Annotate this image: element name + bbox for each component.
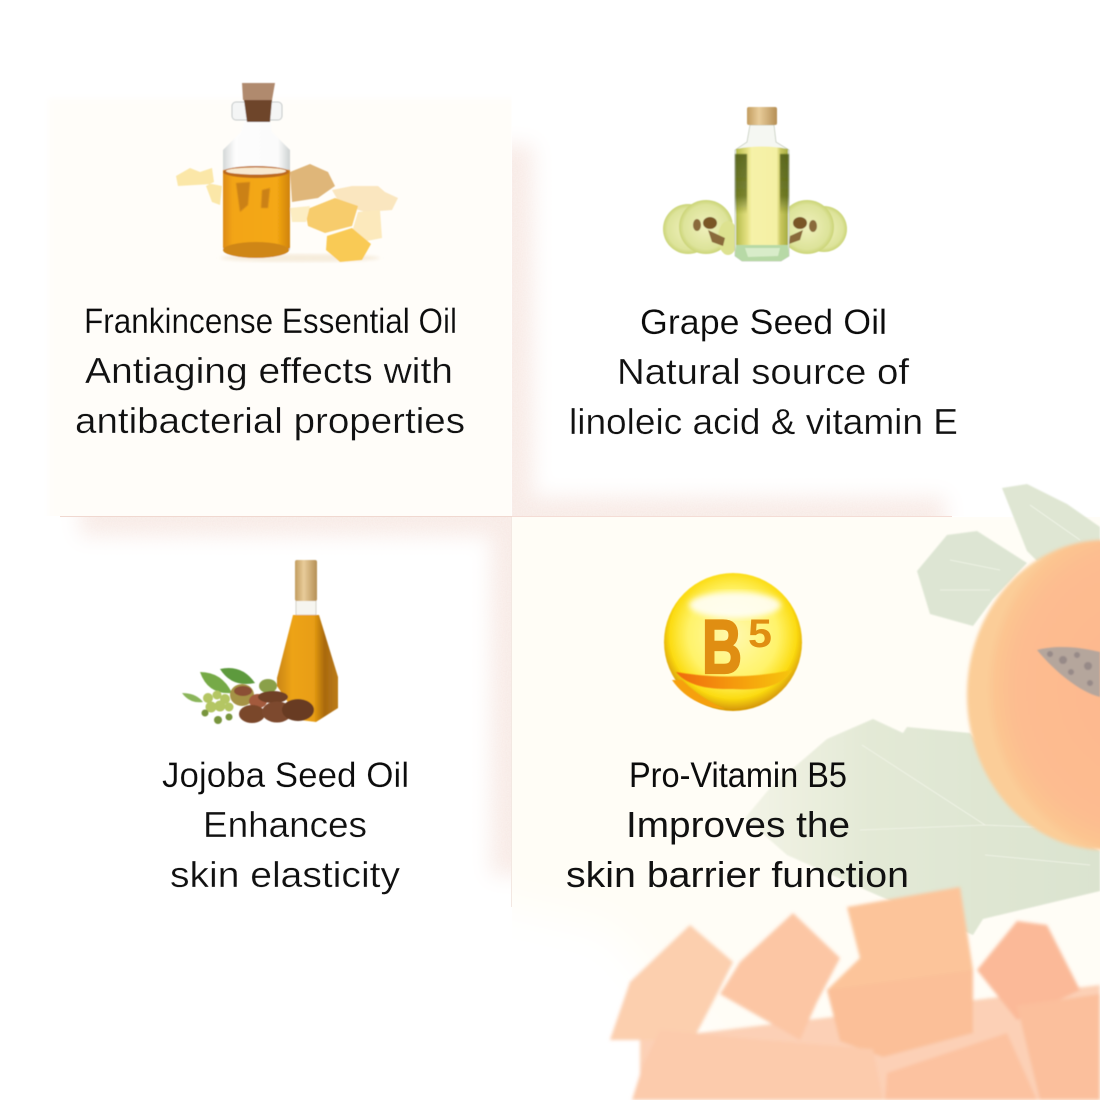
- panel: jojoba seed oil: [162, 560, 409, 895]
- heading: Jojoba Seed Oil: Jojoba Seed Oil: [162, 756, 409, 795]
- panel: frankincense essential oil: [75, 83, 465, 441]
- text: improves the: Improves the: [626, 804, 850, 845]
- papaya half: [967, 540, 1100, 850]
- panel background top left: [48, 98, 528, 538]
- text: natural source: Natural source of: [617, 351, 910, 392]
- label: 5: 5: [748, 612, 772, 656]
- leaf veins: [860, 505, 1100, 865]
- background: papaya and leaves: [610, 484, 1100, 1100]
- text: enhances: Enhances: [203, 804, 367, 845]
- pink textured shadow: bottom left panel: [76, 517, 511, 878]
- cream panel background bottom right: [512, 520, 1100, 1028]
- leaf: top right: [1002, 484, 1100, 561]
- text: skin barrier function: skin barrier function: [566, 854, 909, 895]
- heading: Grape Seed Oil: Grape Seed Oil: [640, 303, 887, 342]
- label: B: B: [702, 605, 742, 690]
- leaf: large lower: [745, 719, 1100, 935]
- pink textured shadow: top right panel: [512, 142, 949, 516]
- papaya seeds: [1037, 647, 1100, 697]
- icon: jojoba oil bottle with seeds and leaves: [182, 560, 338, 724]
- papaya cubes: [610, 887, 1100, 1100]
- panel divider lines: [60, 516, 952, 907]
- panel: grape seed oil: [569, 107, 958, 442]
- leaf: left of papaya: [917, 531, 1027, 626]
- heading: Frankincense Essential Oil: Frankincense Essential Oil: [84, 302, 457, 341]
- icon: grape seed oil bottle with grapes: [663, 107, 847, 261]
- panel: pro-vitamin B5: [566, 573, 909, 895]
- text: antibacterial benefit: antibacterial properties: [75, 400, 465, 441]
- icon: vitamin B5 capsule: [664, 573, 802, 711]
- heading: Pro-Vitamin B5: Pro-Vitamin B5: [629, 756, 847, 795]
- icon: frankincense bottle with resin: [176, 83, 398, 262]
- text: antiaging benefit: Antiaging effects with: [85, 350, 453, 391]
- text: linoleic acid and vitamin E: linoleic acid & vitamin E: [569, 401, 958, 442]
- text: skin elasticity: skin elasticity: [170, 854, 400, 895]
